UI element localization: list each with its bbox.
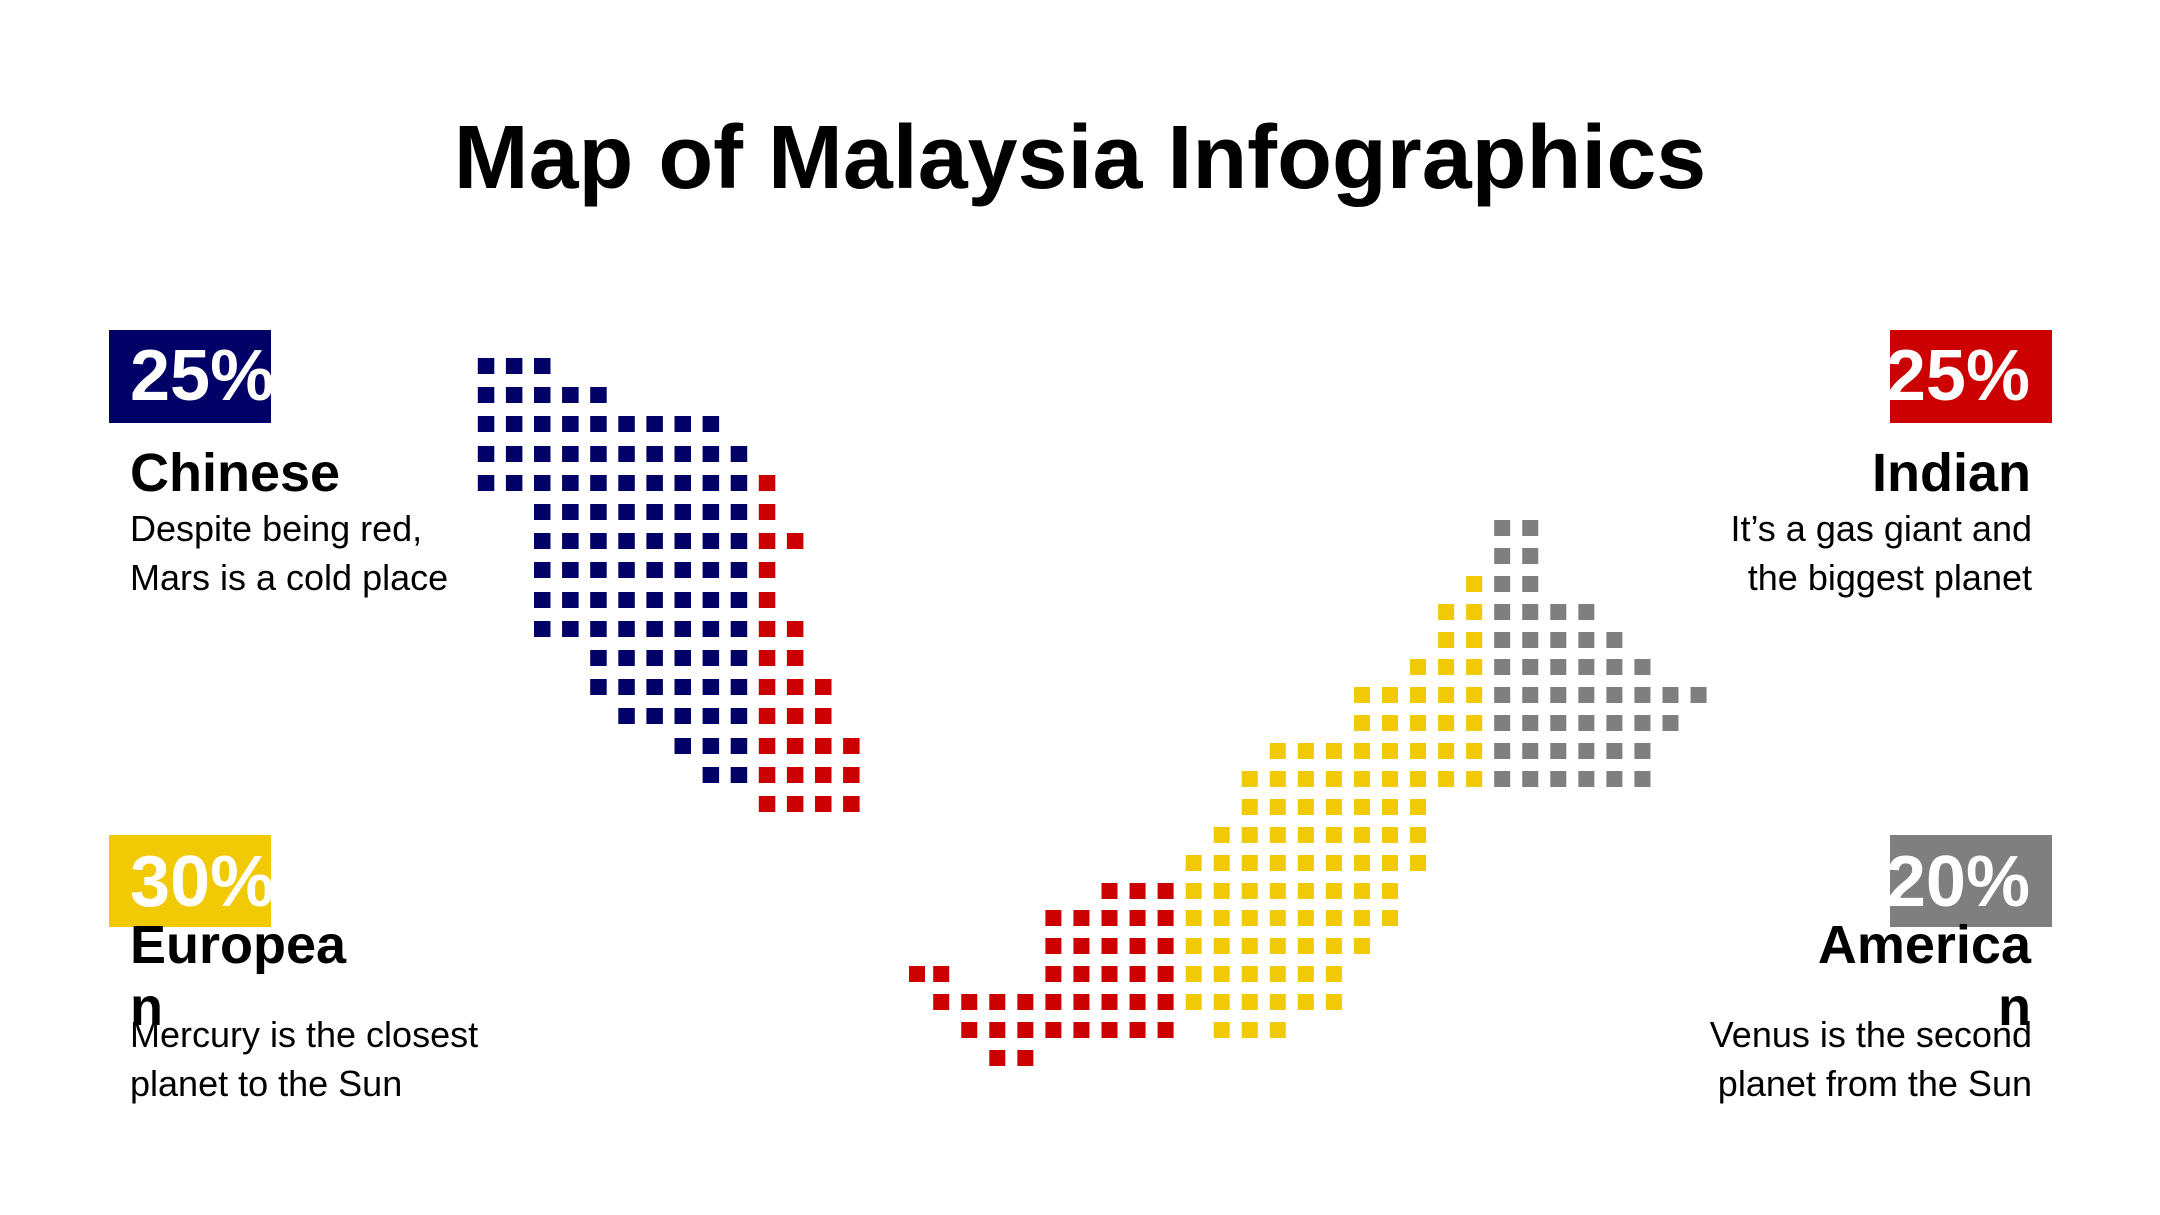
percentage badge: Indian 25%: 25% (1886, 336, 2030, 416)
description: European (130, 1014, 478, 1104)
map region: Chinese squares (478, 366, 748, 775)
description: Indian: It’s a gas giant and (1730, 508, 2032, 549)
heading: American: America (1818, 915, 2032, 975)
heading: Chinese: Chinese (130, 443, 340, 503)
heading: American (1818, 915, 2032, 1037)
heading: European (130, 915, 347, 1037)
description: Chinese: Mars is a cold place (130, 557, 448, 598)
map: East Malaysia (909, 528, 1707, 1058)
heading: Indian: Indian (1872, 443, 2031, 503)
panel: Chinese (109, 330, 448, 598)
description: Chinese (130, 508, 448, 598)
description: American (1710, 1014, 2032, 1104)
map: Peninsular Malaysia (478, 366, 860, 804)
description: European: Mercury is the closest (130, 1014, 478, 1055)
title: Map of Malaysia Infographics (454, 108, 1706, 208)
heading: American: n (1998, 977, 2031, 1037)
map region: Indian squares (Borneo) (909, 891, 1174, 1058)
description: American: planet from the Sun (1718, 1063, 2032, 1104)
panel: Indian (1730, 330, 2052, 598)
percentage badge: European 30%: 30% (130, 842, 274, 922)
percentage badge: American 20%: 20% (1886, 842, 2030, 922)
heading: European: Europea (130, 915, 347, 975)
description: Indian (1730, 508, 2032, 598)
description: Indian: the biggest planet (1748, 557, 2032, 598)
map region: Indian squares (peninsula) (759, 483, 860, 804)
description: European: planet to the Sun (130, 1063, 402, 1104)
percentage badge: Chinese 25%: 25% (130, 336, 274, 416)
map region: European squares (1186, 584, 1482, 1030)
panel: European (109, 835, 478, 1104)
map region: American squares (1494, 528, 1707, 779)
description: American: Venus is the second (1710, 1014, 2032, 1055)
heading: European: n (130, 977, 163, 1037)
panel: American (1710, 835, 2052, 1104)
description: Chinese: Despite being red, (130, 508, 422, 549)
